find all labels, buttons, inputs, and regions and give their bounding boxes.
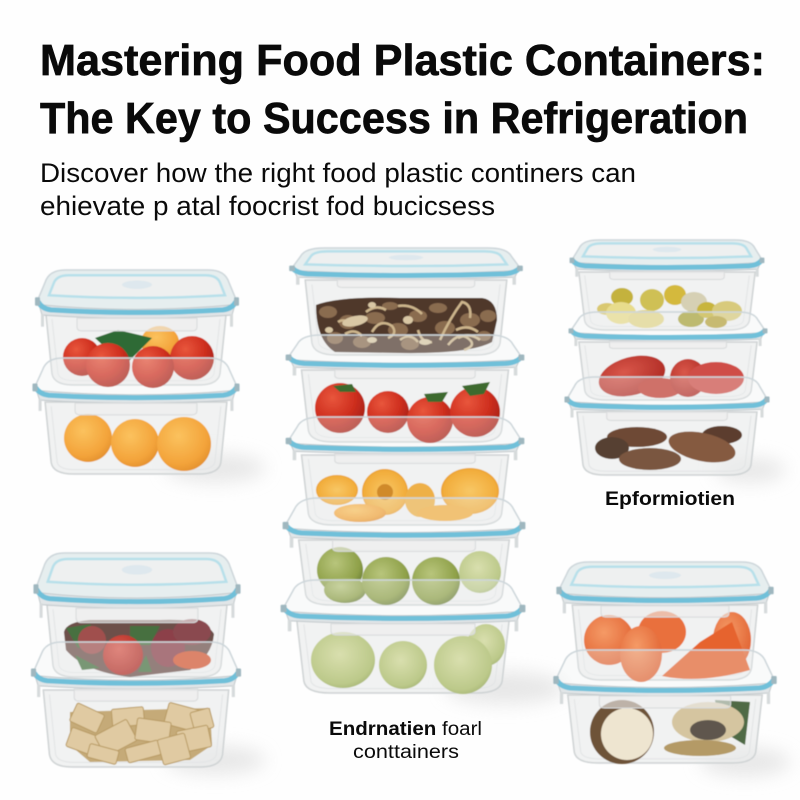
container: red tomatoes [286,335,524,443]
label: centre: Endrnatien foarl [329,719,482,740]
container: olive slices [570,240,764,330]
container: tan chunks [31,642,241,767]
container: mushrooms [553,650,777,764]
container: dark nuts [289,248,523,355]
container: mixed berries [33,553,241,677]
container: pale green fruit [281,580,525,694]
stack: bottom right containers [553,562,777,764]
subtitle: Discover how the right food plastic continers can [40,158,636,188]
title: The Key to Success in Refrigeration [40,94,748,143]
label: centre: conttainers [353,742,459,763]
stack: left top containers [32,270,240,474]
stack: centre containers [281,248,525,694]
floor shadows [165,454,790,776]
label: right column: Epformiotien [605,489,735,510]
title: Mastering Food Plastic Containers: [40,36,765,85]
stack: bottom left containers [31,553,241,767]
stack: right top containers [564,240,770,475]
container: oranges [32,358,240,474]
subtitle: ehievate p atal foocrist fod bucicsess [40,191,495,221]
container: salmon [556,562,774,682]
title [40,36,765,143]
container: red slices [569,312,767,403]
label: centre [329,719,482,763]
container: yellow slices [286,417,524,525]
container: green grapes [283,498,525,605]
subtitle [40,158,636,221]
container: dark brown pieces [564,377,770,475]
container: tomatoes [35,270,239,388]
